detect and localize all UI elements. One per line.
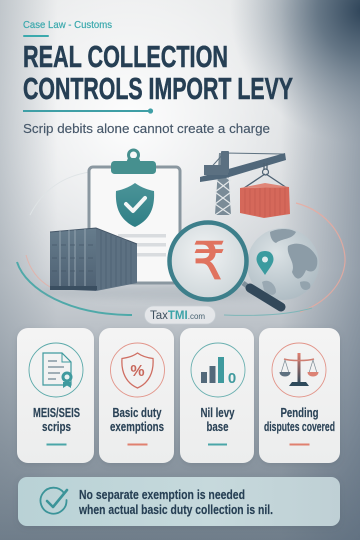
clipboard [89, 150, 180, 283]
crane [200, 151, 290, 218]
title: REAL COLLECTION [23, 40, 228, 74]
label: Basic duty [112, 405, 162, 420]
icon: percent shield: % [130, 363, 145, 380]
hook and ropes [244, 163, 287, 188]
icon: certificate document [29, 343, 83, 397]
callout banner [18, 477, 340, 526]
label: MEIS/SEIS [33, 405, 80, 420]
card: nil levy base [180, 328, 254, 463]
subtitle: Scrip debits alone cannot create a charge [23, 122, 270, 136]
card: basic duty exemptions [99, 328, 174, 463]
header [23, 19, 293, 136]
logo badge: TaxTMI.com [150, 310, 205, 322]
card: pending disputes covered [259, 328, 340, 463]
icon: bars and zero: 0 [228, 370, 236, 387]
icon: scales [272, 343, 326, 397]
callout text: when actual basic duty collection is nil. [78, 502, 273, 517]
location pin [256, 251, 274, 275]
ground shadow [40, 284, 300, 300]
title rule [23, 108, 153, 114]
label: Nil levy [200, 405, 235, 420]
document lines [118, 234, 166, 256]
card: MEIS/SEIS scrips [17, 328, 94, 463]
clipboard clip [111, 150, 156, 174]
label: base [206, 419, 228, 434]
logo badge [144, 306, 216, 324]
icon: check circle [41, 488, 67, 514]
magnifying glass [170, 222, 281, 307]
title [23, 40, 293, 106]
globe [247, 228, 319, 300]
callout text: No separate exemption is needed [79, 487, 245, 502]
shipping container [50, 228, 137, 291]
label: exemptions [110, 419, 164, 434]
category label: Case Law - Customs [23, 19, 112, 31]
handle [243, 283, 250, 288]
label: Pending [280, 405, 319, 420]
illustration [17, 150, 345, 324]
category rule [23, 35, 49, 37]
label: scrips [42, 419, 71, 434]
rupee symbol: ₹ [192, 232, 226, 292]
red container [240, 187, 290, 218]
decorative rings [17, 172, 345, 315]
shield check [116, 183, 154, 227]
